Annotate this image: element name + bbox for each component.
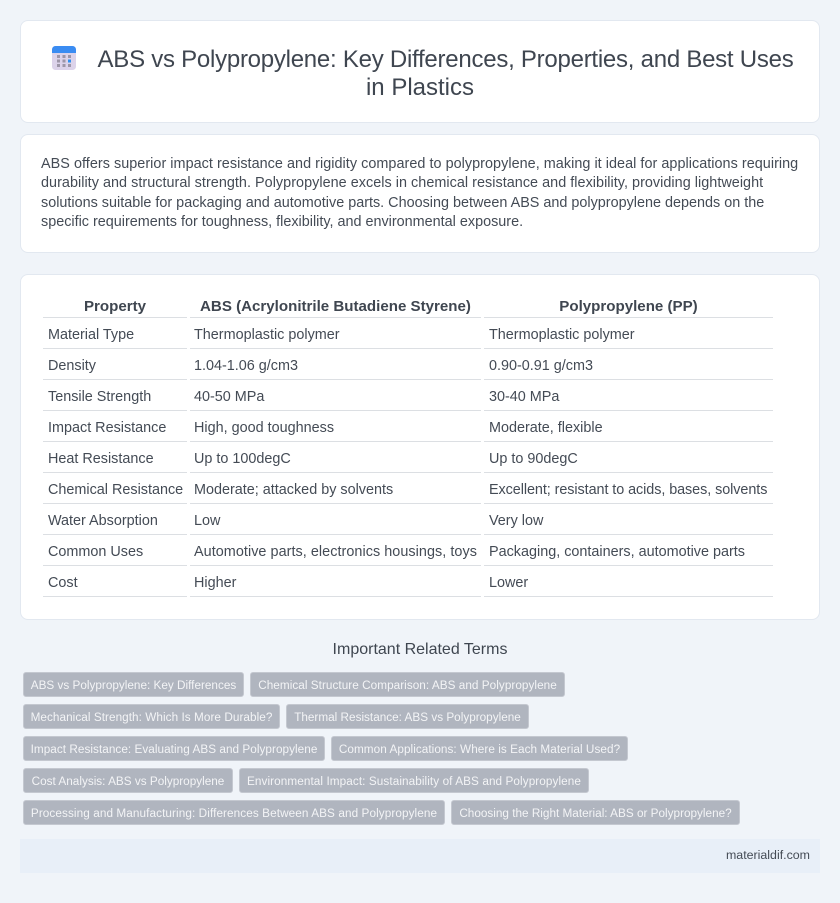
comparison table: ABS (Acrylonitrile Butadiene Styrene) [200,298,471,315]
tag list: related terms: Processing and Manufacturing: Differences Between ABS and Polypropylene [31,807,437,820]
panel: comparison table card [20,274,820,620]
tag list: related terms: ABS vs Polypropylene: Key Differences [31,679,236,692]
comparison table: Packaging, containers, automotive parts [489,544,745,560]
comparison table: Moderate; attacked by solvents [194,482,393,498]
comparison table: Very low [489,513,543,529]
text block: summary: ABS offers superior impact resistance and rigidity compared to polypropylene, making it ideal for applications requiring [41,156,798,172]
comparison table: Common Uses [48,544,143,560]
tag list: related terms: Thermal Resistance: ABS vs Polypropylene [294,711,521,724]
tag list: related terms: Impact Resistance: Evaluating ABS and Polypropylene [31,743,317,756]
icon: calendar [52,46,76,70]
comparison table: Cost [48,575,78,591]
text block: summary [41,156,798,230]
comparison table: Higher [194,575,236,591]
comparison table: Low [194,513,220,529]
comparison table: Up to 100degC [194,451,291,467]
comparison table: Moderate, flexible [489,420,603,436]
comparison table: 1.04-1.06 g/cm3 [194,358,298,374]
panel: summary text card [20,134,820,253]
text block: summary: specific requirements for toughness, flexibility, and environmental exposure. [41,214,523,230]
tag list: related terms: Mechanical Strength: Which Is More Durable? [31,711,272,724]
tag list: related terms: Environmental Impact: Sustainability of ABS and Polypropylene [247,775,581,788]
text block: summary: solutions suitable for packaging and automotive parts. Choosing between ABS and polypropylene depends on the [41,195,764,211]
title [98,46,793,101]
tag list: related terms: Cost Analysis: ABS vs Polypropylene [32,775,224,788]
comparison table: Impact Resistance [48,420,166,436]
comparison table: 0.90-0.91 g/cm3 [489,358,593,374]
panel: header card [20,20,820,123]
comparison table: High, good toughness [194,420,334,436]
comparison table: Polypropylene (PP) [559,298,698,315]
footer: materialdif.com [726,848,810,862]
comparison table: Excellent; resistant to acids, bases, solvents [489,482,767,498]
heading: related terms: Important Related Terms [333,641,507,658]
comparison table: Property [84,298,146,315]
tag list: related terms: Chemical Structure Comparison: ABS and Polypropylene [258,679,557,692]
comparison table: Density [48,358,96,374]
comparison table: Water Absorption [48,513,158,529]
comparison table: Thermoplastic polymer [489,327,635,343]
footer [20,839,820,873]
tag list: related terms [23,672,740,825]
comparison table: Material Type [48,327,134,343]
comparison table: Tensile Strength [48,389,151,405]
text block: summary: durability and structural strength. Polypropylene excels in chemical resistance and flexibility, providing lightweight [41,175,763,191]
comparison table: Automotive parts, electronics housings, toys [194,544,477,560]
comparison table: Heat Resistance [48,451,154,467]
title: ABS vs Polypropylene: Key Differences, Properties, and Best Uses [98,46,793,73]
comparison table: 40-50 MPa [194,389,264,405]
comparison table: Up to 90degC [489,451,578,467]
tag list: related terms: Common Applications: Where is Each Material Used? [339,743,620,756]
tag list: related terms: Choosing the Right Material: ABS or Polypropylene? [459,807,732,820]
comparison table [43,298,773,597]
comparison table: Thermoplastic polymer [194,327,340,343]
comparison table: Lower [489,575,528,591]
title: in Plastics [366,74,474,101]
comparison table: 30-40 MPa [489,389,559,405]
comparison table: Chemical Resistance [48,482,183,498]
